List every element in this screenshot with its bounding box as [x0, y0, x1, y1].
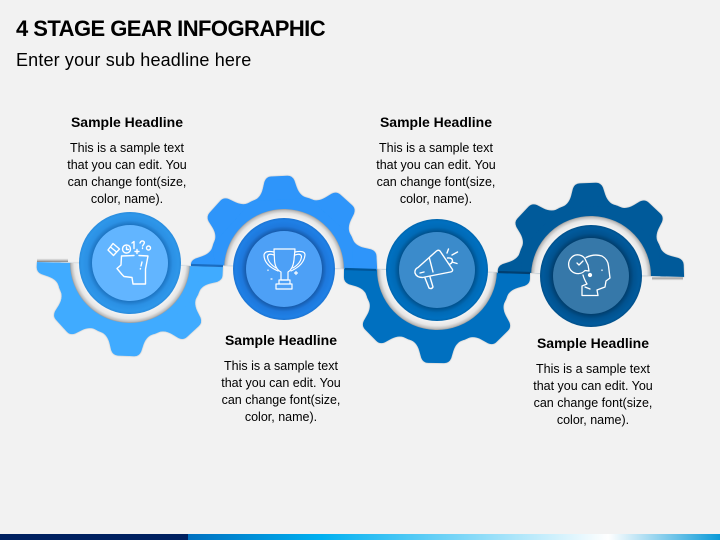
text block 3: can change font(size,	[377, 175, 495, 189]
icon: megaphone	[415, 249, 458, 289]
subtitle: Enter your sub headline here	[16, 50, 251, 70]
icon: trophy	[264, 249, 305, 289]
text block 1: that you can edit. You	[67, 158, 187, 172]
text block 1: This is a sample text	[70, 140, 184, 154]
bottom bar gradient	[188, 534, 720, 540]
gear 1	[36, 262, 224, 357]
text block 3: Sample Headline	[380, 114, 492, 130]
text block 2: can change font(size,	[222, 393, 340, 407]
icon: head with ideas	[108, 241, 150, 284]
bottom bar left	[0, 534, 188, 540]
text block 2: that you can edit. You	[221, 376, 341, 390]
text block 3: that you can edit. You	[376, 158, 496, 172]
text block 4: that you can edit. You	[533, 379, 653, 393]
text block 4: Sample Headline	[537, 335, 649, 351]
text block 1: color, name).	[91, 192, 163, 206]
text block 2: This is a sample text	[224, 358, 338, 372]
gears and icons graphic	[0, 175, 720, 540]
text block 4: can change font(size,	[534, 396, 652, 410]
shadow: gear 1 left end	[37, 258, 68, 262]
text block 1	[67, 114, 187, 206]
disc 1	[79, 212, 181, 314]
shadow: gear 4 right end	[652, 278, 683, 280]
gear 3	[343, 268, 531, 364]
text block 2: color, name).	[245, 410, 317, 424]
gear 4	[497, 182, 685, 278]
seam shadows between gears	[191, 265, 530, 273]
text block 4	[533, 335, 653, 427]
text block 4: This is a sample text	[536, 362, 650, 376]
title: 4 STAGE GEAR INFOGRAPHIC	[16, 16, 325, 41]
text block 3: color, name).	[400, 192, 472, 206]
text block 3: This is a sample text	[379, 140, 493, 154]
disc 4	[540, 225, 642, 327]
text block 3	[376, 114, 496, 206]
text block 2: Sample Headline	[225, 332, 337, 348]
gear 2	[190, 175, 378, 270]
text block 2	[221, 332, 341, 424]
disc 2	[233, 218, 335, 320]
disc 3	[386, 219, 488, 321]
text block 1: can change font(size,	[68, 175, 186, 189]
icon: head with thought bubble	[569, 255, 610, 296]
text block 1: Sample Headline	[71, 114, 183, 130]
text block 4: color, name).	[557, 413, 629, 427]
